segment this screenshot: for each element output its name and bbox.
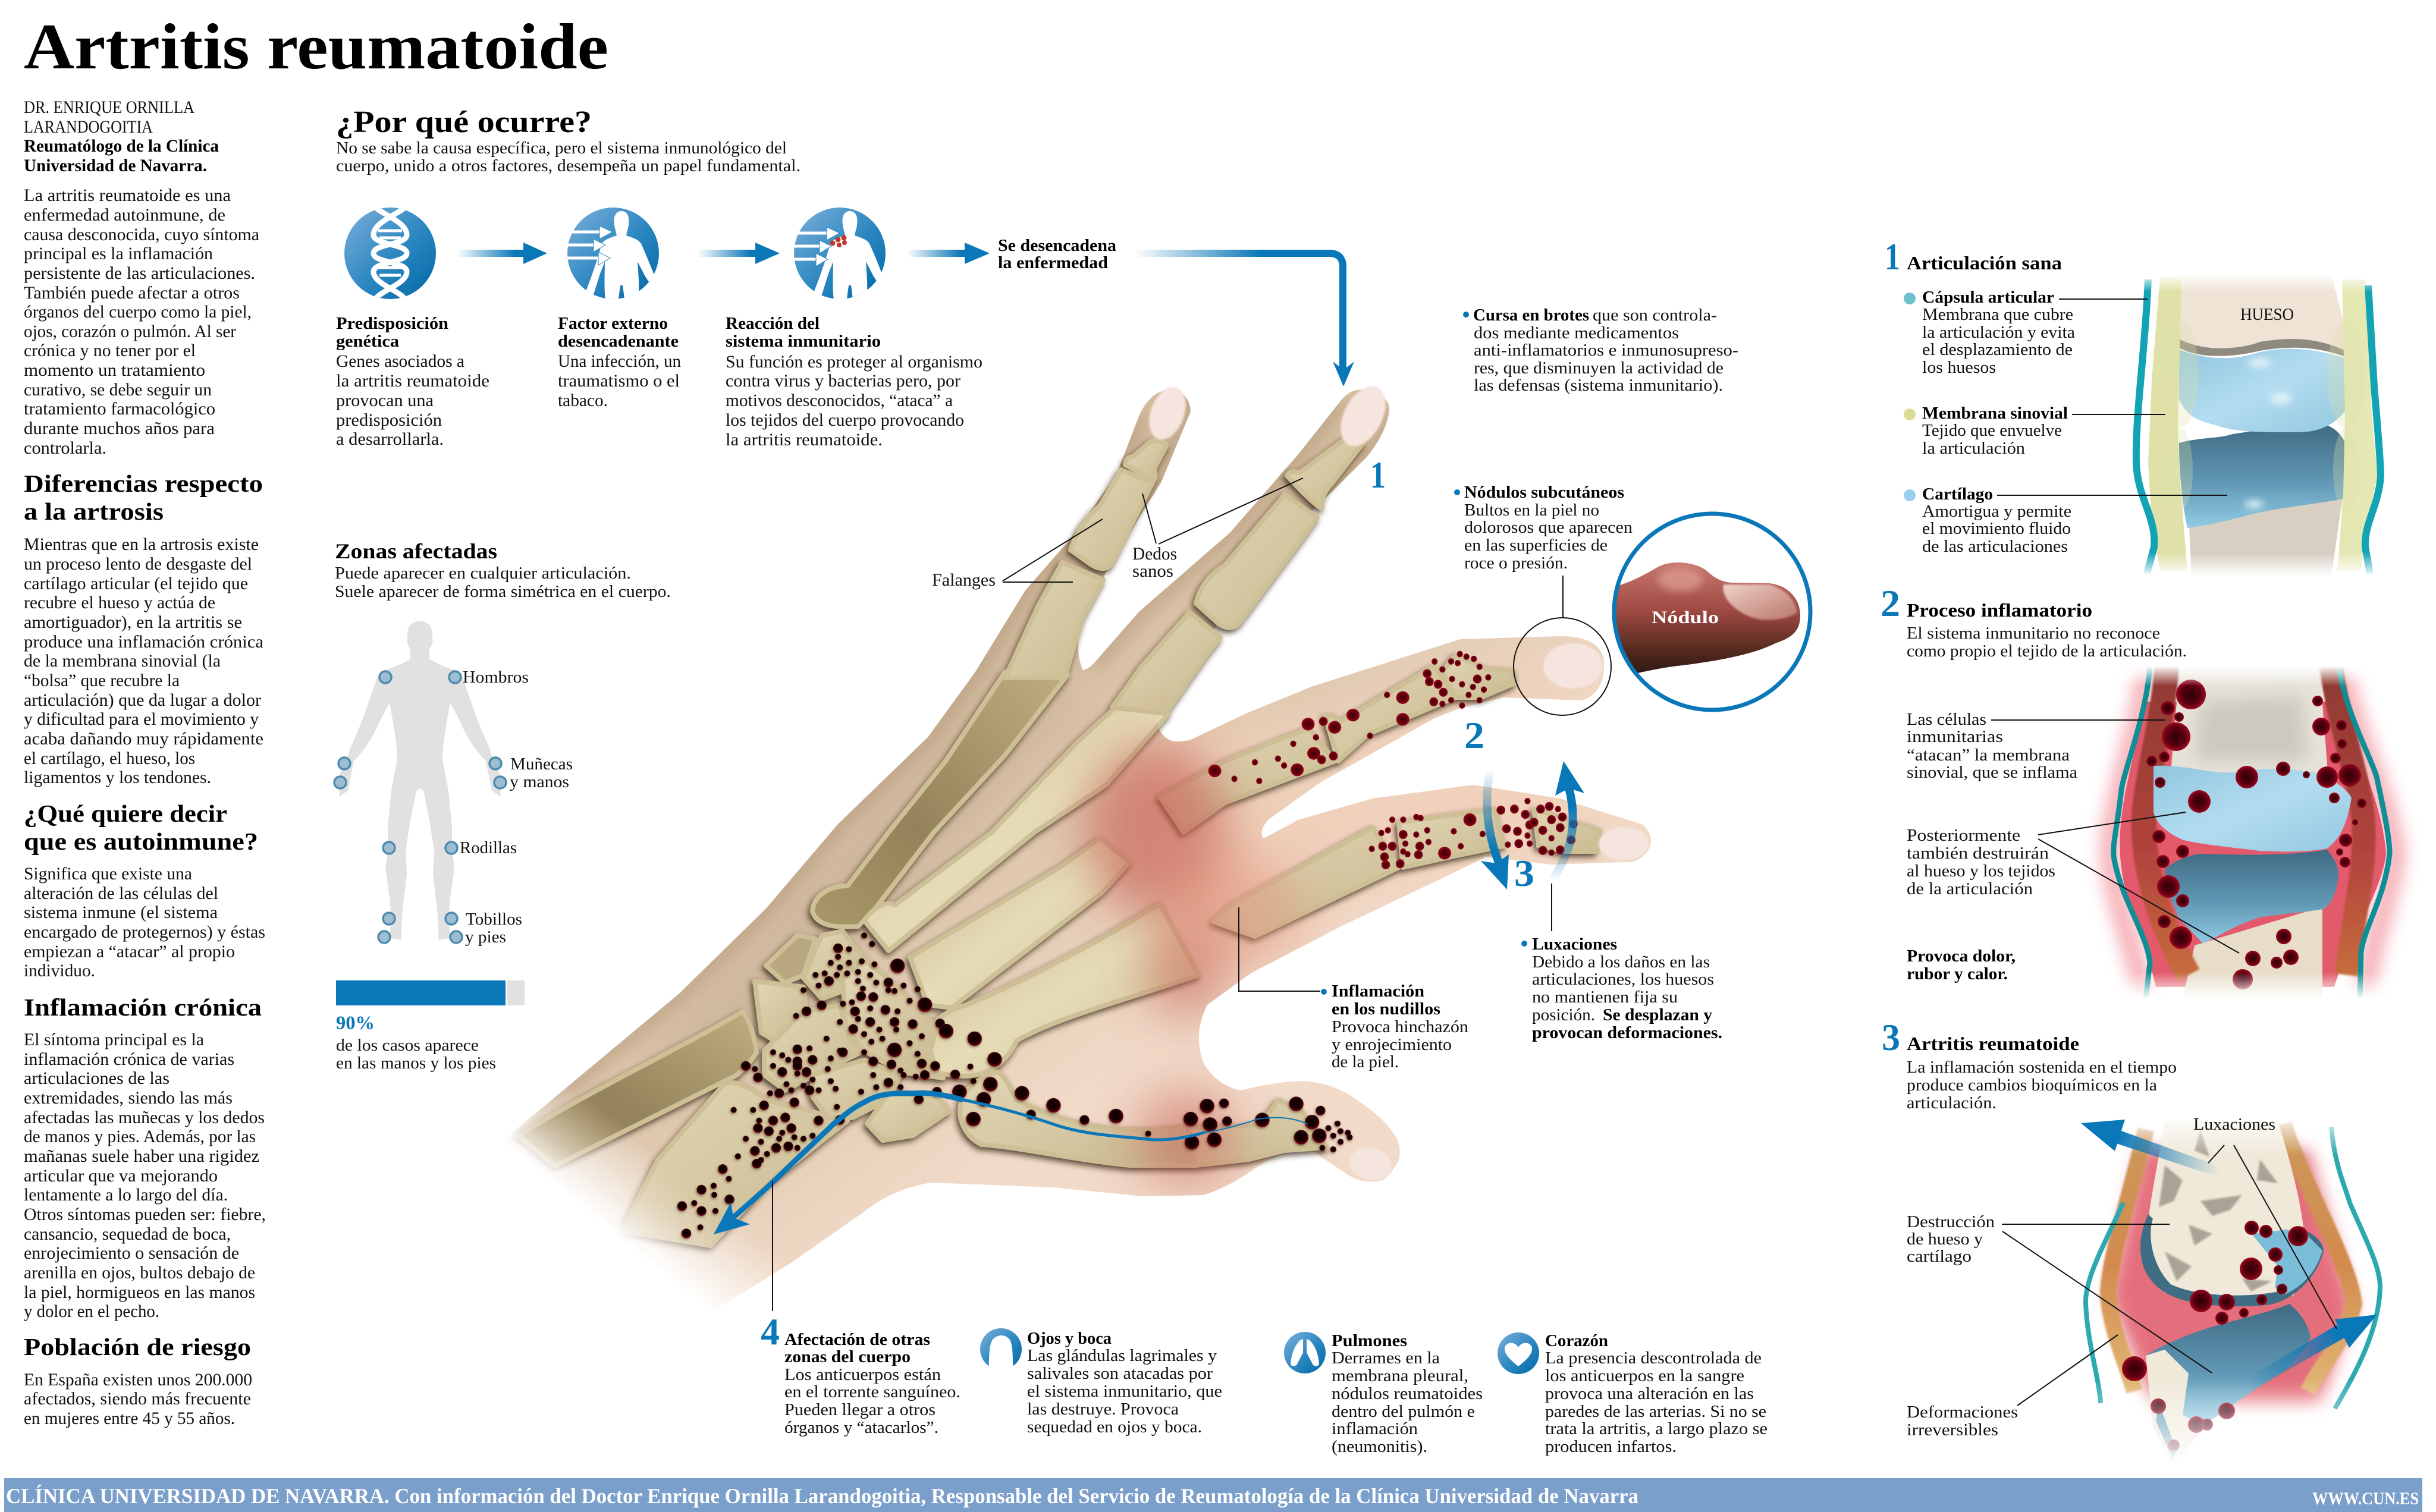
text: pulmones: dentro del pulmón e: [1332, 1403, 1475, 1421]
legend: cartílago: [1904, 485, 2071, 556]
panel: por qué ocurre: [336, 105, 1354, 449]
immune cell dots: wrist, forearm and thumb: [677, 932, 1352, 1238]
immune cell dots: two affected fingers: [1208, 651, 1578, 869]
text: deformaciones: irreversibles: [1907, 1421, 1998, 1439]
text: autoinmune: sistema inmune (el sistema: [24, 903, 218, 922]
blue arrow: spread through the bloodstream: [714, 1093, 1307, 1234]
text: autoinmune: encargado de protegernos) y éstas: [24, 922, 265, 942]
immune cells in the joint: [2122, 1221, 2308, 1451]
leader lines: [1991, 720, 2239, 953]
text: predisposición genética: predisposición: [336, 410, 442, 430]
heading: población de riesgo: Población de riesgo: [24, 1333, 251, 1360]
text: ojos y boca: Ojos y boca: [1027, 1329, 1112, 1348]
text: inflamación crónica: y dolor en el pecho.: [24, 1302, 159, 1321]
heading: articulación sana: 1: [1885, 235, 1900, 278]
text: reacción del sistema inmunitario: [726, 315, 982, 449]
icon: lungs: [1284, 1332, 1326, 1373]
text: diferencias: produce una inflamación crónica: [24, 632, 263, 652]
text: destrucción: [1907, 1213, 1995, 1266]
text: diferencias: de la membrana sinovial (la: [24, 651, 221, 671]
text: provoca dolor: [1907, 947, 2016, 983]
text: población de riesgo: afectados, siendo más frecuente: [24, 1389, 251, 1409]
text: corazón: Corazón: [1545, 1332, 1608, 1350]
joint markers: [334, 671, 506, 943]
icon: person with external factor: [565, 208, 659, 303]
text: ojos y boca: el sistema inmunitario, que: [1027, 1382, 1222, 1401]
callout numbers on fingers: 3: [1514, 852, 1534, 894]
intro text: durante muchos años para: [24, 419, 215, 438]
text: corazón: paredes de las arterias. Si no se: [1545, 1403, 1766, 1421]
text: pulmones: Pulmones: [1332, 1332, 1407, 1350]
intro text: ojos, corazón o pulmón. Al ser: [24, 322, 236, 341]
text: inflamación crónica: mañanas suele haber una rigidez: [24, 1146, 259, 1166]
callout: luxaciones: Se desplazan y: [1603, 1006, 1712, 1024]
text: pulmones: membrana pleural,: [1332, 1367, 1468, 1385]
callout: cursa en brotes: que son controla-: [1593, 306, 1717, 325]
label: se desencadena la enfermedad: Se desencadena: [998, 237, 1116, 255]
text: autoinmune: [24, 864, 265, 980]
text: factor externo: Una infección, un: [558, 351, 681, 371]
text: diferencias: [24, 535, 263, 787]
text: pulmones: (neumonitis).: [1332, 1438, 1427, 1456]
callout: cursa en brotes: anti-inflamatorios e inmunosupreso-: [1474, 341, 1738, 360]
legend: cápsula articular: la articulación y evita: [1922, 323, 2076, 342]
callout: luxaciones: Debido a los daños en las: [1532, 953, 1710, 972]
text: autoinmune: alteración de las células del: [24, 884, 218, 903]
text: autoinmune: Significa que existe una: [24, 864, 192, 884]
callout: nódulos subcutáneos: [1454, 483, 1633, 573]
joint labels: y pies: [465, 928, 506, 947]
text: corazón: provoca una alteración en las: [1545, 1385, 1754, 1403]
footer credit: CLÍNICA UNIVERSIDAD DE NAVARRA. Con información del Doctor Enrique Ornilla Larandogoitia, Responsable del Servicio de Reumatología de la Clínica Universidad de Navarra: [6, 1484, 1638, 1508]
text: posteriormente: Posteriormente: [1907, 826, 2020, 845]
intro text: crónica y no tener por el: [24, 341, 196, 360]
text: reacción del sistema inmunitario: la artritis reumatoide.: [726, 430, 883, 449]
text: factor externo: Factor externo: [558, 315, 668, 333]
callout: nódulos subcutáneos: dolorosos que aparecen: [1464, 518, 1633, 537]
heading: zonas afectadas: Zonas afectadas: [335, 539, 497, 563]
title: Artritis reumatoide: [24, 11, 608, 83]
text: ojos y boca: sequedad en ojos y boca.: [1027, 1418, 1202, 1436]
text: diferencias: ligamentos y los tendones.: [24, 768, 211, 787]
text: predisposición genética: Genes asociados a: [336, 351, 464, 371]
text: destrucción: Destrucción: [1907, 1213, 1995, 1231]
legend: cartílago: de las articulaciones: [1922, 537, 2068, 556]
leader lines: [1997, 299, 2227, 495]
text: afectación de otras zonas: Pueden llegar a otros: [784, 1401, 936, 1419]
intro text: [24, 186, 259, 458]
callout: luxaciones: provocan deformaciones.: [1532, 1024, 1722, 1042]
joint labels: [460, 668, 573, 947]
callout numbers on fingers: 2: [1464, 714, 1484, 756]
legend: cápsula articular: Cápsula articular: [1922, 288, 2054, 307]
intro text: cuerpo, unido a otros factores, desempeña un papel fundamental.: [336, 157, 801, 175]
callout: inflamación en los nudillos: de la piel.: [1332, 1053, 1399, 1071]
joint labels: Rodillas: [460, 839, 517, 857]
text: inflamación crónica: articular que va mejorando: [24, 1166, 218, 1186]
callout: inflamación en los nudillos: Inflamación: [1332, 982, 1424, 1001]
joint illustration: healthy: [2136, 274, 2381, 577]
legend: cápsula articular: Membrana que cubre: [1922, 306, 2073, 324]
intro text: enfermedad autoinmune, de: [24, 205, 225, 225]
text: ojos y boca: salivales son atacadas por: [1027, 1365, 1213, 1383]
text: inflamación crónica: afectadas las muñecas y los dedos: [24, 1108, 265, 1127]
text: factor externo: traumatismo o el: [558, 371, 680, 391]
body silhouette: [339, 621, 501, 939]
callout: nódulos subcutáneos: roce o presión.: [1464, 554, 1568, 573]
arrow: displacement up-left: [2081, 1120, 2221, 1177]
label: hueso: HUESO: [2240, 306, 2294, 324]
panel: zonas afectadas: [334, 539, 671, 1073]
text: afectación de otras zonas: [784, 1331, 960, 1437]
number 4: 4: [761, 1310, 780, 1353]
text: diferencias: recubre el hueso y actúa de: [24, 593, 215, 612]
text: reacción del sistema inmunitario: contra virus y bacterias pero, por: [726, 371, 960, 391]
text: células inmunitarias: [1907, 711, 2078, 782]
text: provoca dolor: Provoca dolor,: [1907, 947, 2016, 966]
finger bones: [960, 436, 1599, 1165]
intro text: articulación.: [1907, 1094, 1996, 1112]
stat caption: en las manos y los pies: [336, 1054, 496, 1073]
legend: cartílago: Amortigua y permite: [1922, 502, 2071, 521]
text: células inmunitarias: inmunitarias: [1907, 728, 2003, 746]
arrow 3: [907, 243, 990, 264]
intro text: No se sabe la causa específica, pero el sistema inmunológico del: [336, 139, 787, 158]
text: diferencias: articulación) que da lugar a dolor: [24, 690, 261, 710]
heading: articulación sana: Articulación sana: [1907, 252, 2062, 274]
heading: artritis reumatoide: Artritis reumatoide: [1907, 1033, 2079, 1054]
label: luxaciones: Luxaciones: [2193, 1115, 2275, 1134]
callout numbers on fingers: 1: [1370, 454, 1386, 496]
text: inflamación crónica: El síntoma principal es la: [24, 1030, 204, 1049]
legend: cápsula articular: los huesos: [1922, 359, 1996, 377]
legend: cartílago: el movimiento fluido: [1922, 520, 2071, 538]
text: afectación de otras zonas: órganos y “atacarlos”.: [784, 1419, 938, 1437]
intro text: momento un tratamiento: [24, 360, 205, 380]
text: diferencias: un proceso lento de desgaste del: [24, 554, 252, 574]
text: inflamación crónica: la piel, hormigueos en las manos: [24, 1282, 255, 1302]
forearm bones: [518, 1011, 756, 1166]
heading: inflamación crónica: Inflamación crónica: [24, 994, 262, 1021]
text: predisposición genética: provocan una: [336, 391, 434, 410]
legend: membrana sinovial: Tejido que envuelve: [1922, 422, 2062, 440]
text: corazón: [1545, 1332, 1768, 1456]
arrow 1: [457, 243, 547, 264]
callout numbers on fingers: [1370, 454, 1534, 894]
intro text: controlarla.: [24, 438, 106, 458]
intro text: La inflamación sostenida en el tiempo: [1907, 1058, 2177, 1077]
intro text: [1907, 624, 2187, 661]
inflammation redness: [1085, 743, 1302, 1186]
callout: inflamación en los nudillos: en los nudillos: [1332, 1000, 1440, 1019]
labels: falanges and dedos sanos: sanos: [1132, 561, 1173, 581]
callout: nódulos subcutáneos: Nódulos subcutáneos: [1464, 483, 1624, 502]
heading: proceso inflamatorio: 2: [1881, 582, 1900, 624]
long arrow down to the hand: [1135, 253, 1354, 386]
text: factor externo: [558, 315, 681, 410]
text: diferencias: acaba dañando muy rápidamente: [24, 729, 263, 749]
label: se desencadena la enfermedad: [998, 237, 1116, 272]
text: corazón: los anticuerpos en la sangre: [1545, 1367, 1744, 1385]
callout: cursa en brotes: las defensas (sistema inmunitario).: [1474, 376, 1723, 395]
callout: cursa en brotes: res, que disminuyen la actividad de: [1474, 359, 1724, 378]
arrow: displacement down-right: [2244, 1315, 2377, 1391]
label: nódulo: Nódulo: [1652, 608, 1719, 627]
text: inflamación crónica: cansancio, sequedad de boca,: [24, 1224, 231, 1244]
icon: eyes and mouth: [980, 1328, 1022, 1370]
text: inflamación crónica: lentamente a lo largo del día.: [24, 1185, 228, 1205]
text: diferencias: Mientras que en la artrosis existe: [24, 535, 259, 554]
text: autoinmune: individuo.: [24, 961, 95, 980]
joint labels: Tobillos: [466, 910, 522, 929]
legend: cápsula articular: el desplazamiento de: [1922, 341, 2073, 359]
heading: diferencias: Diferencias respecto: [24, 470, 263, 497]
callout: nódulos subcutáneos: en las superficies de: [1464, 536, 1608, 555]
text: destrucción: de hueso y: [1907, 1230, 1983, 1249]
author credit: [24, 98, 219, 175]
text: población de riesgo: [24, 1370, 252, 1428]
heading: artritis reumatoide: [1882, 1016, 2079, 1058]
intro text: tratamiento farmacológico: [24, 399, 215, 419]
leader lines on the hand: [773, 478, 1563, 1311]
label: se desencadena la enfermedad: la enfermedad: [998, 254, 1108, 272]
text: predisposición genética: Predisposición: [336, 315, 448, 333]
heading: por qué ocurre: ¿Por qué ocurre?: [336, 105, 592, 139]
heading: articulación sana: [1885, 235, 2062, 278]
intro text: [336, 139, 801, 175]
intro text: Puede aparecer en cualquier articulación.: [335, 564, 631, 583]
callout: luxaciones: posición.: [1532, 1006, 1595, 1024]
panel: left text column: [24, 98, 266, 1428]
text: reacción del sistema inmunitario: Reacción del: [726, 315, 820, 333]
text: pulmones: [1332, 1332, 1483, 1456]
text: ojos y boca: las destruye. Provoca: [1027, 1400, 1179, 1419]
text: afectación de otras zonas: Afectación de otras: [784, 1331, 930, 1349]
joint labels: y manos: [510, 773, 569, 791]
callout: cursa en brotes: Cursa en brotes: [1473, 306, 1589, 325]
leader lines: [2002, 1145, 2337, 1406]
intro text: [335, 564, 671, 601]
text: pulmones: nódulos reumatoides: [1332, 1385, 1483, 1403]
text: factor externo: desencadenante: [558, 332, 679, 351]
text: deformaciones: [1907, 1403, 2018, 1439]
text: diferencias: y dificultad para el movimiento y: [24, 709, 259, 729]
icon: person with immune reaction: [794, 208, 886, 303]
heading: autoinmune: ¿Qué quiere decir: [24, 800, 227, 827]
callout: luxaciones: [1521, 935, 1722, 1042]
text: inflamación crónica: Otros síntomas pueden ser: fiebre,: [24, 1205, 266, 1224]
labels: falanges and dedos sanos: Dedos: [1132, 544, 1177, 564]
text: inflamación crónica: articulaciones de las: [24, 1068, 169, 1088]
text: factor externo: tabaco.: [558, 391, 608, 410]
text: posteriormente: también destruirán: [1907, 844, 2049, 863]
panel: afectación de otras zonas: [761, 1310, 1768, 1456]
text: predisposición genética: [336, 315, 489, 449]
legend: cartílago: Cartílago: [1922, 485, 1993, 504]
text: afectación de otras zonas: en el torrente sanguíneo.: [784, 1383, 960, 1401]
panel: 3 artritis reumatoide: [1882, 1016, 2380, 1469]
text: inflamación crónica: de manos y pies. Además, por las: [24, 1127, 256, 1146]
hand illustration: [476, 379, 1651, 1362]
callout: cursa en brotes: dos mediante medicamentos: [1474, 324, 1679, 342]
text: células inmunitarias: Las células: [1907, 711, 1986, 729]
panel: 1 articulación sana: [1885, 235, 2381, 577]
text: predisposición genética: genética: [336, 332, 399, 351]
callout: luxaciones: no mantienen fija su: [1532, 988, 1678, 1007]
arrow 2: [698, 243, 780, 264]
intro text: como propio el tejido de la articulación.: [1907, 642, 2187, 661]
text: provoca dolor: rubor y calor.: [1907, 965, 2008, 983]
hand skin: [476, 389, 1651, 1362]
intro text: Suele aparecer de forma simétrica en el cuerpo.: [335, 583, 671, 601]
text: inflamación crónica: [24, 1030, 266, 1321]
text: pulmones: inflamación: [1332, 1420, 1418, 1438]
text: reacción del sistema inmunitario: sistema inmunitario: [726, 332, 881, 351]
fingernails: [1142, 379, 1649, 1185]
text: afectación de otras zonas: zonas del cuerpo: [784, 1348, 911, 1366]
stat caption: de los casos aparece: [336, 1036, 479, 1055]
text: células inmunitarias: sinovial, que se inflama: [1907, 763, 2078, 782]
text: corazón: La presencia descontrolada de: [1545, 1349, 1762, 1368]
text: corazón: trata la artritis, a largo plazo se: [1545, 1420, 1768, 1438]
panel: 2 proceso inflamatorio: [1881, 582, 2396, 999]
heading: artritis reumatoide: 3: [1882, 1016, 1900, 1058]
footer band: [4, 1478, 2422, 1512]
callout: nódulos subcutáneos: Bultos en la piel no: [1464, 501, 1599, 520]
text: pulmones: Derrames en la: [1332, 1349, 1440, 1368]
heading: autoinmune: [24, 800, 258, 855]
text: reacción del sistema inmunitario: motivos desconocidos, “ataca” a: [726, 391, 953, 410]
text: diferencias: “bolsa” que recubre la: [24, 671, 180, 690]
legend: membrana sinovial: Membrana sinovial: [1922, 404, 2068, 423]
legend: cápsula articular: [1904, 288, 2076, 377]
text: corazón: producen infartos.: [1545, 1438, 1677, 1456]
callout: inflamación en los nudillos: y enrojecimiento: [1332, 1036, 1452, 1054]
heading: proceso inflamatorio: Proceso inflamatorio: [1907, 599, 2092, 621]
text: posteriormente: [1907, 826, 2055, 898]
text: ojos y boca: Las glándulas lagrimales y: [1027, 1347, 1217, 1365]
text: población de riesgo: en mujeres entre 45 y 55 años.: [24, 1409, 235, 1428]
intro text: órganos del cuerpo como la piel,: [24, 302, 252, 322]
callout: inflamación en los nudillos: [1321, 982, 1468, 1071]
text: células inmunitarias: “atacan” la membrana: [1907, 746, 2070, 765]
author credit: Universidad de Navarra.: [24, 156, 207, 175]
text: predisposición genética: la artritis reumatoide: [336, 371, 489, 391]
nodule magnifier: [1606, 514, 1810, 710]
stat caption: [336, 1036, 496, 1073]
text: reacción del sistema inmunitario: Su función es proteger al organismo: [726, 352, 982, 372]
author credit: LARANDOGOITIA: [24, 117, 153, 137]
stat: 90%: 90%: [336, 1013, 375, 1034]
heading: diferencias: [24, 470, 263, 525]
text: predisposición genética: a desarrollarla.: [336, 429, 444, 449]
text: población de riesgo: En España existen unos 200.000: [24, 1370, 252, 1390]
small circle around fingertip: [1514, 618, 1611, 715]
progress bar 90%: [336, 980, 525, 1005]
heading: autoinmune: que es autoinmune?: [24, 828, 258, 855]
legend: membrana sinovial: la articulación: [1922, 439, 2025, 458]
intro text: produce cambios bioquímicos en la: [1907, 1076, 2158, 1095]
wrist carpal bones: [755, 931, 949, 1140]
heading: proceso inflamatorio: [1881, 582, 2092, 624]
author credit: Reumatólogo de la Clínica: [24, 136, 219, 156]
intro text: El sistema inmunitario no reconoce: [1907, 624, 2160, 643]
callout: luxaciones: articulaciones, los huesos: [1532, 970, 1714, 989]
legend: membrana sinovial: [1904, 404, 2068, 458]
text: ojos y boca: [1027, 1329, 1222, 1436]
intro text: causa desconocida, cuyo síntoma: [24, 225, 259, 244]
labels: falanges and dedos sanos: Falanges: [932, 570, 996, 590]
text: posteriormente: de la articulación: [1907, 880, 2033, 898]
labels: falanges and dedos sanos: [932, 544, 1177, 590]
intro text: curativo, se debe seguir un: [24, 380, 212, 400]
intro text: persistente de las articulaciones.: [24, 263, 255, 283]
bones of the hand: [518, 436, 1599, 1246]
joint illustration: inflamed: [2110, 666, 2396, 999]
text: deformaciones: Deformaciones: [1907, 1403, 2018, 1422]
footer url: WWW.CUN.ES: [2312, 1489, 2419, 1508]
callout: cursa en brotes: [1463, 306, 1738, 395]
metacarpal bones: [812, 672, 1198, 1076]
text: posteriormente: al hueso y los tejidos: [1907, 862, 2055, 881]
text: inflamación crónica: extremidades, siendo las más: [24, 1088, 233, 1108]
curved arrows: luxation: [1481, 761, 1584, 889]
callout: inflamación en los nudillos: Provoca hinchazón: [1332, 1018, 1468, 1036]
intro text: También puede afectar a otros: [24, 283, 240, 303]
callout: luxaciones: Luxaciones: [1532, 935, 1617, 954]
intro text: principal es la inflamación: [24, 244, 213, 263]
text: inflamación crónica: inflamación crónica de varias: [24, 1049, 234, 1069]
text: diferencias: amortiguador), en la artritis se: [24, 612, 242, 632]
text: diferencias: el cartílago, el hueso, los: [24, 749, 195, 768]
immune cells in the joint: [2146, 680, 2366, 989]
text: destrucción: cartílago: [1907, 1247, 1972, 1266]
text: autoinmune: empiezan a “atacar” al propio: [24, 942, 235, 961]
text: diferencias: cartílago articular (el tejido que: [24, 574, 248, 593]
text: reacción del sistema inmunitario: los tejidos del cuerpo provocando: [726, 410, 964, 430]
author credit: DR. ENRIQUE ORNILLA: [24, 98, 194, 117]
heading: diferencias: a la artrosis: [24, 498, 164, 525]
icon: heart: [1498, 1332, 1539, 1374]
joint labels: Muñecas: [510, 755, 573, 774]
icon: dna: [344, 205, 436, 303]
intro text: La artritis reumatoide es una: [24, 186, 231, 205]
intro text: [1907, 1058, 2177, 1112]
joint illustration: rheumatoid arthritis: [2086, 1121, 2380, 1469]
text: afectación de otras zonas: Los anticuerpos están: [784, 1366, 941, 1384]
joint labels: Hombros: [463, 668, 529, 687]
text: inflamación crónica: enrojecimiento o sensación de: [24, 1243, 239, 1263]
text: inflamación crónica: arenilla en ojos, bultos debajo de: [24, 1263, 255, 1282]
radius bone: [621, 1083, 847, 1246]
